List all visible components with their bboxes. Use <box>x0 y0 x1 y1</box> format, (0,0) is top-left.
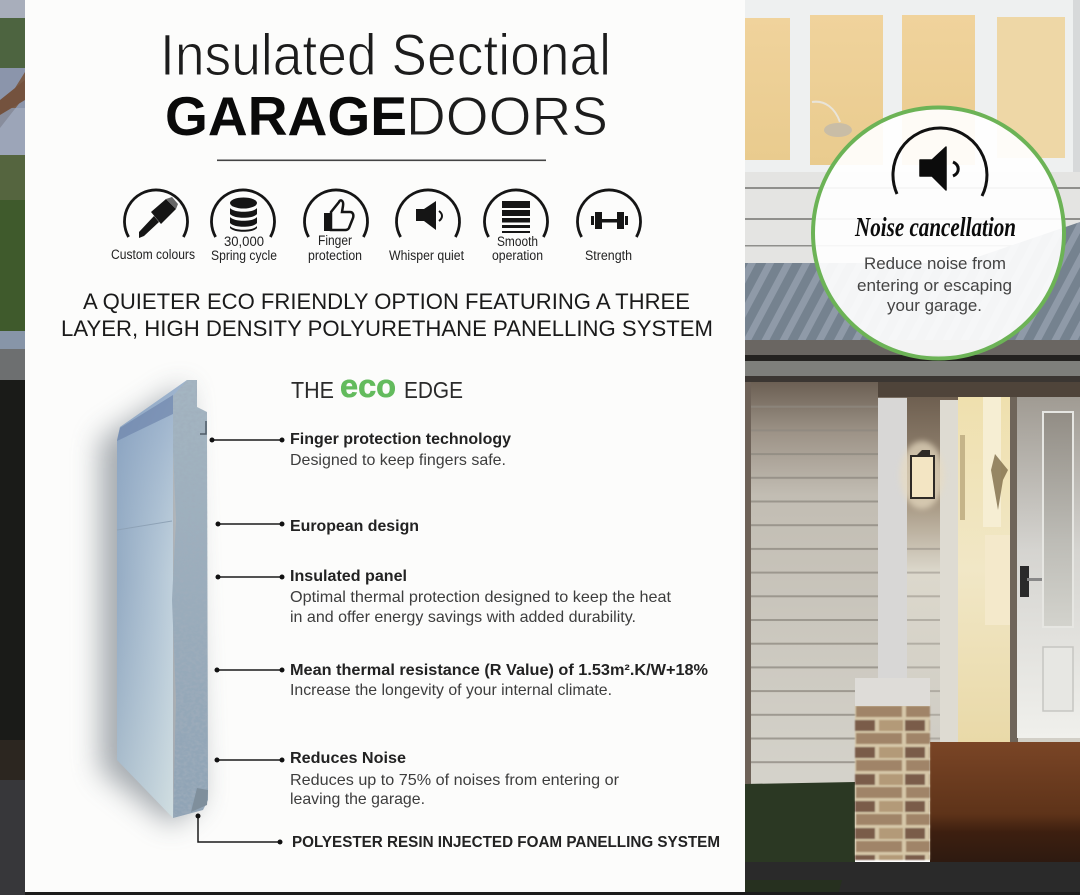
title: DOORS <box>406 85 608 147</box>
left background photo strip <box>0 0 25 895</box>
brick pier <box>855 678 930 860</box>
icon: spring cycle stack <box>211 190 277 263</box>
headline <box>61 289 713 341</box>
lawn <box>745 782 855 880</box>
callout: insulated panel <box>216 568 672 626</box>
icon: spring cycle stack: 30,000 <box>224 234 264 249</box>
badge heading: Noise cancellation <box>854 212 1016 242</box>
roof <box>745 222 1080 340</box>
callout: mean thermal resistance: Increase the longevity of your internal climate. <box>290 682 612 699</box>
lower siding wall <box>745 382 1080 802</box>
right background photo: house front <box>745 0 1080 895</box>
hallway <box>958 397 1010 742</box>
callout: reduces noise: Reduces up to 75% of noises from entering or <box>290 772 620 789</box>
headline: LAYER, HIGH DENSITY POLYURETHANE PANELLING SYSTEM <box>61 316 713 341</box>
icon: smooth operation lines: operation <box>492 248 543 263</box>
white content panel <box>25 0 745 892</box>
section heading: the eco edge: THE <box>291 377 334 403</box>
callout: polyester resin foam <box>196 814 720 851</box>
callout: insulated panel: Optimal thermal protection designed to keep the heat <box>290 589 672 606</box>
callout: polyester resin foam: POLYESTER RESIN INJECTED FOAM PANELLING SYSTEM <box>292 834 720 851</box>
upper wall <box>745 0 1080 265</box>
callout: insulated panel: in and offer energy savings with added durability. <box>290 609 636 626</box>
badge description: Reduce noise from <box>864 254 1006 273</box>
callout: finger protection technology <box>210 431 511 469</box>
icon: finger protection thumb: protection <box>308 248 362 263</box>
ground <box>745 862 1080 895</box>
icon: smooth operation lines: Smooth <box>497 234 538 249</box>
wall lantern <box>900 441 944 509</box>
title <box>160 23 611 147</box>
section heading: the eco edge <box>291 368 463 404</box>
gutter and fascia <box>745 340 1080 358</box>
icon: speaker <box>893 128 987 196</box>
title: Insulated Sectional <box>160 23 611 88</box>
icon: whisper quiet speaker: Whisper quiet <box>389 248 464 263</box>
callout: insulated panel: Insulated panel <box>290 568 407 585</box>
callout: reduces noise <box>214 750 620 808</box>
section heading: the eco edge: EDGE <box>404 377 463 403</box>
door panel cross-section <box>100 380 208 825</box>
badge description <box>857 254 1012 315</box>
callout: reduces noise: leaving the garage. <box>290 791 425 808</box>
icon: strength dumbbell: Strength <box>585 248 632 263</box>
icon: whisper quiet speaker <box>389 190 464 263</box>
callout: finger protection technology: Finger protection technology <box>290 431 511 448</box>
icon: finger protection thumb: Finger <box>318 233 352 248</box>
noise cancellation badge <box>813 108 1064 358</box>
foam edge <box>172 380 208 818</box>
badge description: your garage. <box>887 296 982 315</box>
callout: reduces noise: Reduces Noise <box>290 750 406 767</box>
section heading: the eco edge: eco <box>340 368 396 404</box>
title: GARAGE <box>165 85 407 147</box>
feature icon row <box>111 190 640 263</box>
icon: smooth operation lines <box>485 190 548 263</box>
callout: european design: European design <box>290 518 419 535</box>
timber deck <box>930 742 1080 862</box>
callout: mean thermal resistance: Mean thermal resistance (R Value) of 1.53m².K/W+18% <box>290 662 708 679</box>
badge description: entering or escaping <box>857 276 1012 295</box>
headline: A QUIETER ECO FRIENDLY OPTION FEATURING A THREE <box>83 289 690 314</box>
icon: custom colours brush: Custom colours <box>111 247 195 262</box>
icon: strength dumbbell <box>578 190 640 263</box>
panel shadow <box>100 385 200 825</box>
callout: finger protection technology: Designed to keep fingers safe. <box>290 452 506 469</box>
callout: european design <box>216 518 419 535</box>
callout: mean thermal resistance <box>214 662 708 699</box>
icon: finger protection thumb <box>304 190 368 263</box>
windows <box>745 0 1080 172</box>
front door <box>1010 397 1080 742</box>
porch recess <box>907 397 1010 747</box>
icon: spring cycle stack: Spring cycle <box>211 248 277 263</box>
icon: custom colours brush <box>111 190 195 262</box>
upper siding <box>745 187 1080 246</box>
panel face <box>117 380 197 818</box>
